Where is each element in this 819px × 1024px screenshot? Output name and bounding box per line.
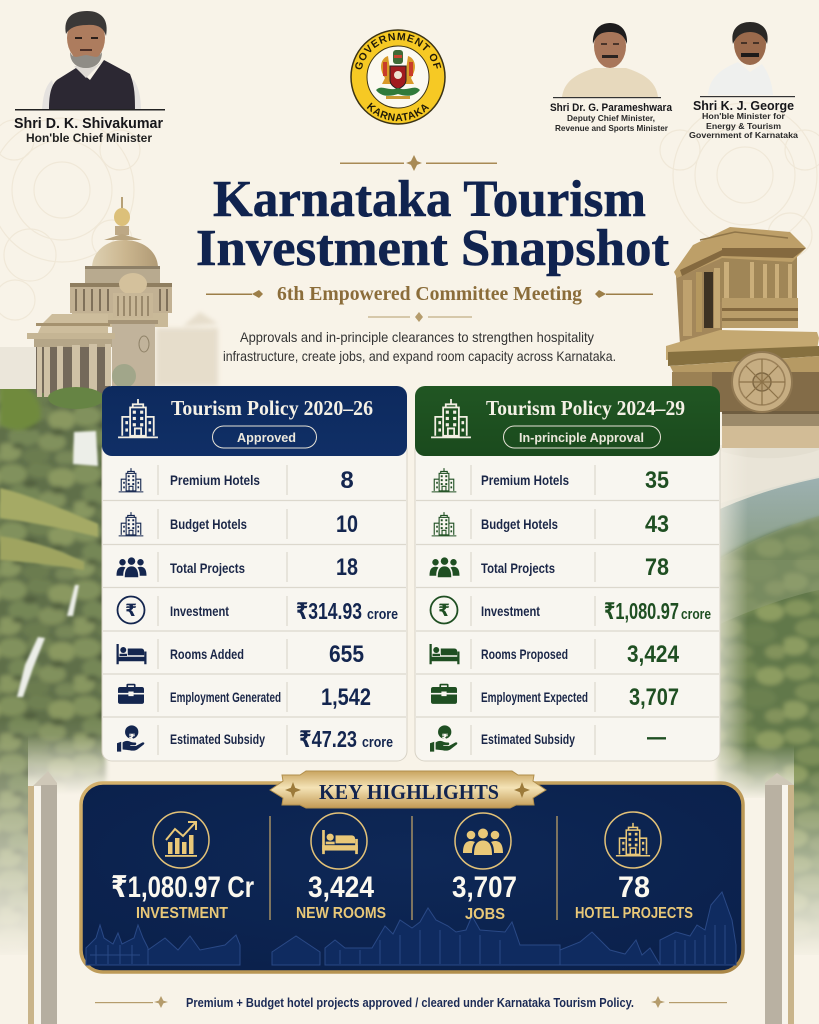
panel header: Approved (237, 430, 296, 445)
ornament below subtitle (368, 312, 472, 322)
highlight: investment (111, 812, 254, 922)
skyline (86, 892, 736, 965)
panel: Tourism Policy 2020-26 (102, 386, 407, 761)
row: Estimated Subsidy: Estimated Subsidy (170, 731, 265, 747)
row: Investment (118, 596, 398, 624)
row: Employment Expected (431, 684, 679, 711)
highlight: new rooms: 3,424 (308, 871, 374, 904)
finial (121, 197, 123, 208)
footer note: Premium + Budget hotel projects approved / cleared under Karnataka Tourism Policy. (186, 996, 634, 1010)
row: Estimated Subsidy: crore (362, 734, 393, 751)
row: Employment Expected: Employment Expected (481, 689, 588, 705)
role: Hon'ble Minister for: Hon'ble Minister for (702, 111, 786, 121)
row: Employment Generated (118, 684, 371, 711)
panel header: Tourism Policy 2024–29 (486, 396, 685, 420)
description: infrastructure, create jobs, and expand room capacity across Karnataka. (223, 348, 616, 364)
row: Investment: ₹1,080.97 (604, 598, 679, 624)
decorative mandala right (660, 103, 819, 257)
name: Shri D. K. Shivakumar: Shri D. K. Shivakumar (14, 116, 163, 132)
emblem: Government of Karnataka: GOVERNMENT OF (355, 32, 442, 70)
illustration: Vidhana Soudha (0, 197, 218, 409)
title: Karnataka Tourism (213, 171, 646, 228)
panel header (415, 386, 720, 456)
banner: key highlights (270, 771, 546, 808)
highlight: new rooms (296, 813, 386, 922)
row: Estimated Subsidy: ₹47.23 (299, 726, 357, 752)
row: Premium Hotels: 8 (340, 467, 354, 494)
row: Budget Hotels: Budget Hotels (170, 516, 247, 532)
row: Investment (430, 596, 711, 624)
row: Investment: crore (367, 606, 398, 623)
subtitle: 6th Empowered Committee Meeting (206, 283, 653, 305)
caption rule: Parameshwara (553, 97, 661, 98)
row: Estimated Subsidy: Estimated Subsidy (481, 731, 575, 747)
row: Employment Expected: 3,707 (629, 684, 679, 711)
caption rule: George (700, 96, 795, 97)
row: Investment: Investment (170, 603, 229, 619)
row: Estimated Subsidy: ₹ (129, 733, 136, 744)
row: Budget Hotels: 43 (645, 511, 669, 538)
emblem: Government of Karnataka (350, 29, 446, 125)
chariot second deck (722, 298, 798, 328)
row: Rooms Proposed: 3,424 (627, 641, 680, 668)
highlight: hotel projects: 78 (618, 871, 650, 904)
row: Total Projects: Total Projects (170, 560, 245, 576)
row: Investment: ₹314.93 (296, 598, 362, 624)
trees in front (48, 387, 104, 409)
ornament above title (340, 155, 497, 171)
row: Rooms Proposed: Rooms Proposed (481, 646, 568, 662)
role: Revenue and Sports Minister: Revenue and Sports Minister (555, 123, 669, 133)
faded left wall (0, 347, 40, 389)
row: Premium Hotels (119, 467, 354, 494)
row: Employment Generated: 1,542 (321, 684, 371, 711)
chariot plinth (666, 330, 819, 360)
icon: building (431, 399, 471, 437)
title: Investment Snapshot (196, 220, 670, 277)
icon: building (118, 399, 158, 437)
highlight: hotel projects (575, 812, 693, 922)
chariot wheel (732, 352, 792, 412)
row: Budget Hotels (432, 511, 669, 538)
highlight: investment: ₹1,080.97 Cr (111, 871, 254, 904)
role: Energy and Tourism: Energy & Tourism (706, 121, 781, 131)
row: Investment: ₹ (438, 601, 450, 620)
name: Shri Dr. G. Parameshwara: Shri Dr. G. Parameshwara (550, 102, 673, 114)
highlight: jobs: JOBS (465, 906, 505, 923)
row: Estimated Subsidy: ₹ (442, 733, 449, 744)
row: Total Projects (116, 554, 358, 581)
row: Premium Hotels (432, 467, 669, 494)
drum (85, 266, 160, 284)
faded right wing (156, 312, 218, 386)
row: Rooms Proposed (430, 641, 680, 668)
role: Government of Karnataka: Government of Karnataka (689, 130, 798, 140)
row: Investment: Investment (481, 603, 540, 619)
porch upper (38, 314, 108, 333)
panel header: In-principle Approval (519, 430, 644, 445)
panel header: Tourism Policy 2020–26 (171, 396, 373, 420)
left landscape: forest hillside and waterfalls (0, 374, 120, 1024)
highlight: jobs (452, 813, 517, 923)
name: Shri K. J. George: Shri K. J. George (693, 99, 794, 113)
portrait: Shri Dr. G. Parameshwara (562, 23, 658, 97)
decorative mandala left (0, 118, 140, 320)
pillar: left stone column (28, 771, 57, 1024)
row: Premium Hotels: Premium Hotels (170, 472, 260, 488)
banner: key highlights: KEY HIGHLIGHTS (319, 780, 499, 804)
subtitle: 6th Empowered Committee Meeting: 6th Empowered Committee Meeting (277, 283, 582, 305)
illustration: stone chariot (666, 227, 819, 448)
role: Hon'ble Chief Minister: Hon'ble Chief Minister (26, 131, 152, 145)
row: Estimated Subsidy: — (647, 724, 666, 751)
row: Employment Generated: Employment Generated (170, 689, 281, 705)
chariot front storey (720, 256, 797, 302)
panel: key highlights (81, 771, 743, 972)
description (223, 329, 616, 364)
role: Deputy Chief Minister: Deputy Chief Minister, (567, 113, 655, 123)
dome (104, 234, 142, 240)
row: Rooms Added: 655 (329, 641, 364, 668)
chariot base (722, 411, 819, 414)
row: Total Projects: 78 (645, 554, 669, 581)
row: Budget Hotels: 10 (336, 511, 358, 538)
row: Investment: ₹ (125, 601, 137, 620)
row: Total Projects: Total Projects (481, 560, 555, 576)
dividers (270, 816, 557, 920)
porch columns (36, 347, 110, 393)
panel header (102, 386, 407, 456)
chariot roof (674, 227, 806, 278)
row: Budget Hotels (119, 511, 358, 538)
emblem: Government of Karnataka: KARNATAKA (366, 102, 430, 122)
caption rule: Shivakumar (15, 109, 165, 110)
row: Estimated Subsidy (430, 724, 666, 752)
right landscape: mountains and forest (704, 440, 819, 1024)
row: Rooms Added (116, 641, 364, 668)
highlight: jobs: 3,707 (452, 871, 517, 904)
highlight: new rooms: NEW ROOMS (296, 905, 386, 922)
row: Budget Hotels: Budget Hotels (481, 516, 558, 532)
row: Investment: crore (681, 606, 711, 623)
waterfalls (17, 431, 98, 697)
chariot left rear mass (676, 258, 722, 345)
crest (376, 50, 420, 99)
highlight: investment: INVESTMENT (136, 905, 228, 922)
row: Estimated Subsidy (117, 725, 393, 752)
pillar: right stone column (765, 773, 794, 1024)
row: Rooms Added: Rooms Added (170, 646, 244, 662)
highlight: hotel projects: HOTEL PROJECTS (575, 905, 693, 922)
row: Total Projects: 18 (336, 554, 358, 581)
panel: Tourism Policy 2024-29 (415, 386, 720, 761)
tower (112, 320, 155, 386)
description: Approvals and in-principle clearances to strengthen hospitality (240, 329, 594, 345)
row: Total Projects (430, 554, 669, 581)
row: Premium Hotels: Premium Hotels (481, 472, 569, 488)
title (196, 171, 670, 277)
portrait: Shri D. K. Shivakumar (42, 11, 141, 110)
portrait: Shri K. J. George (708, 22, 773, 95)
row: Premium Hotels: 35 (645, 467, 669, 494)
